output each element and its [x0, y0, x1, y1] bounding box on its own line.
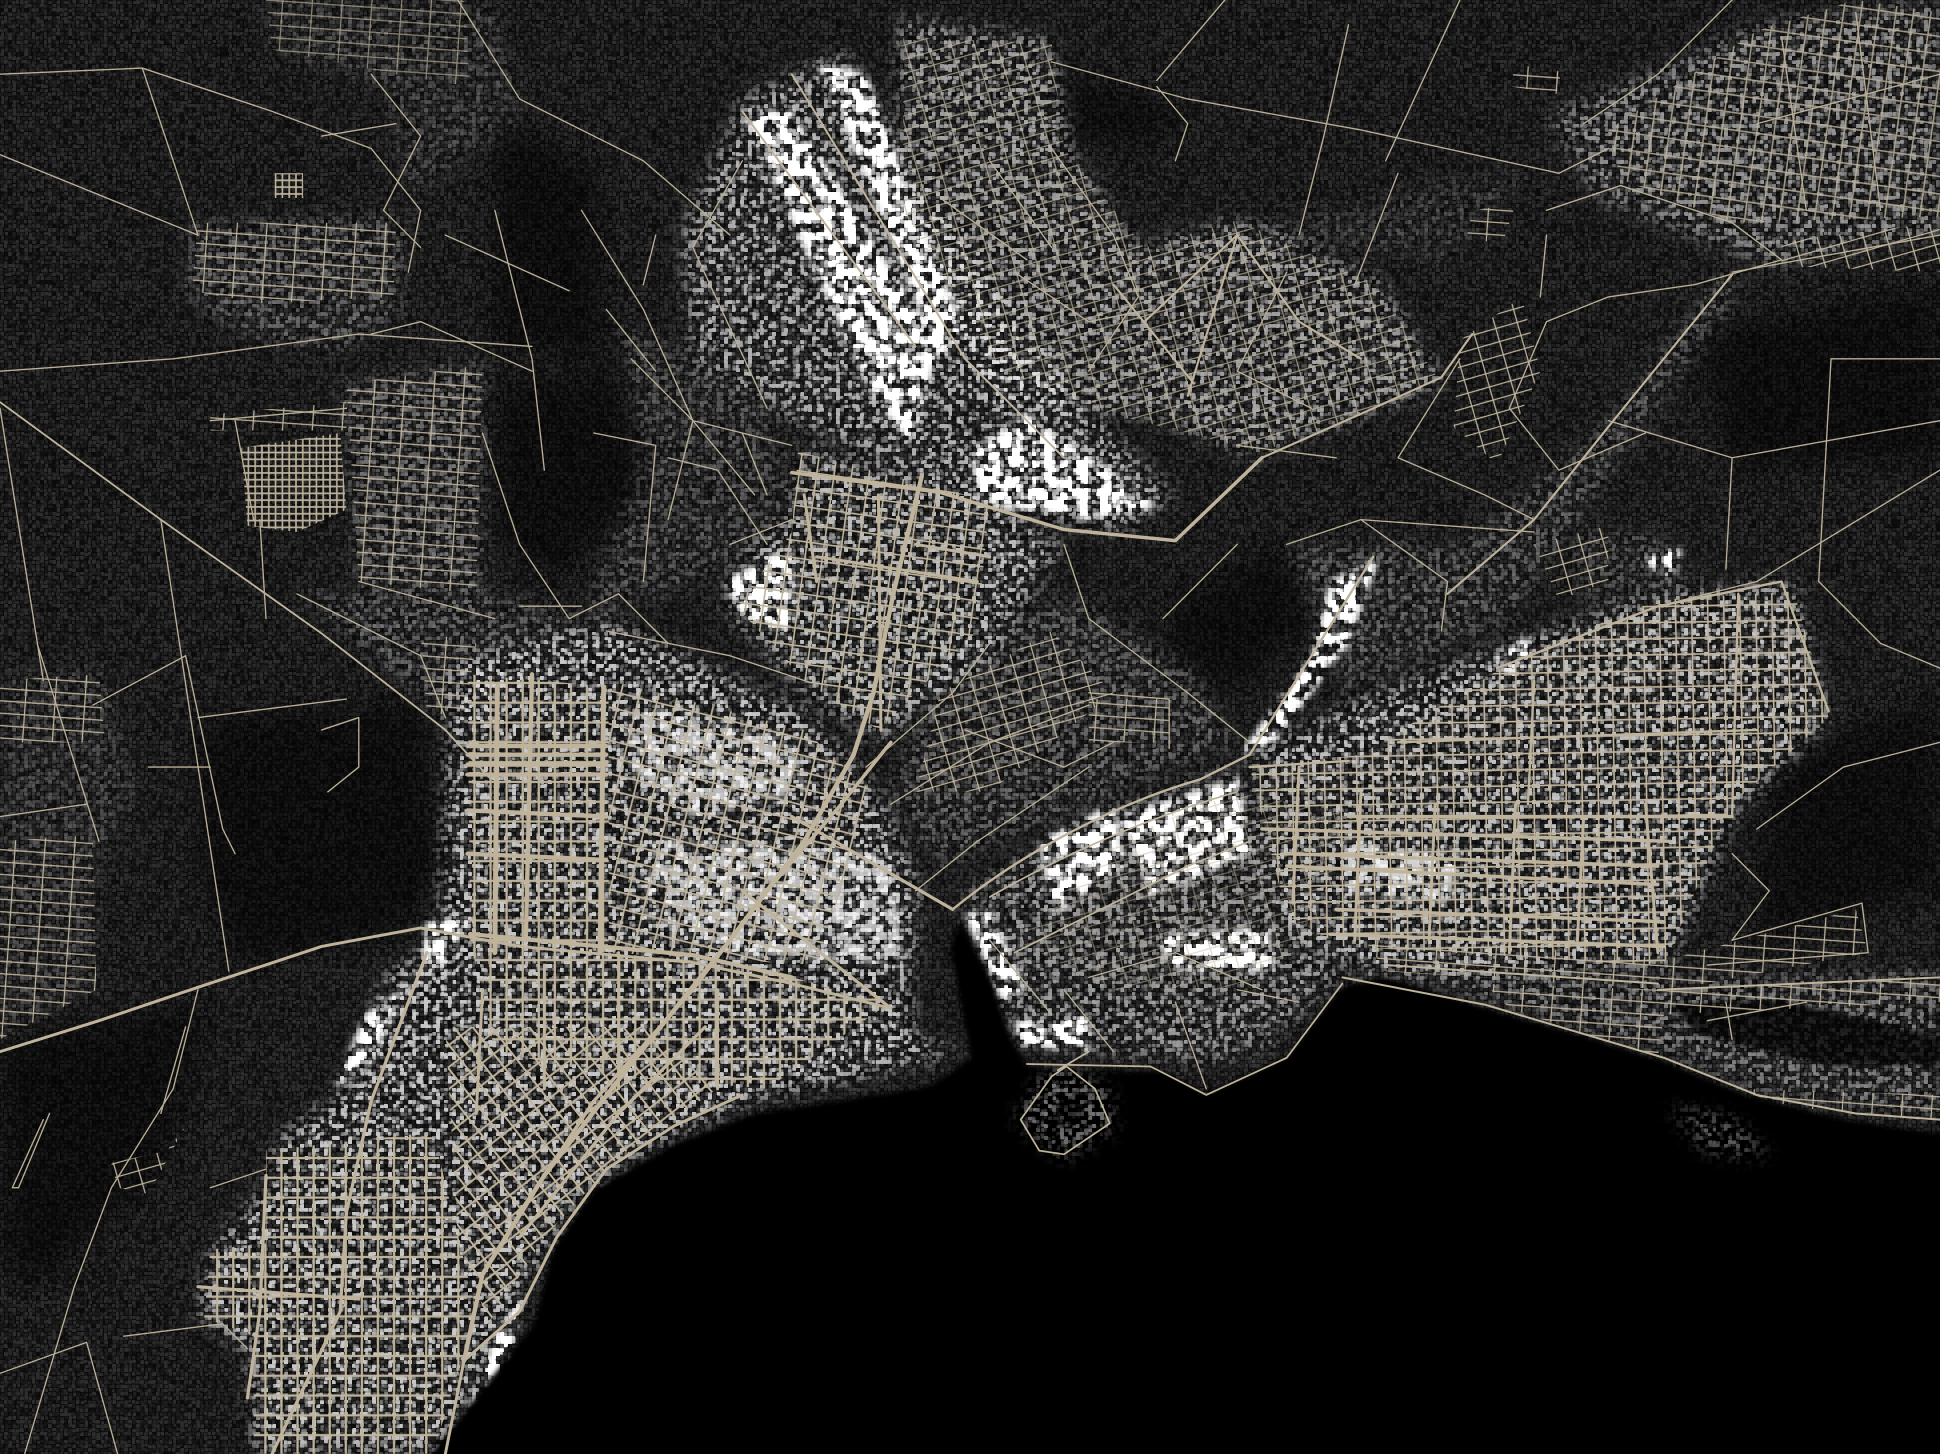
west city: [198, 619, 965, 1454]
road: north west diagonal: [0, 402, 489, 777]
grid: north central: [736, 452, 990, 730]
grid: east city: [1250, 591, 1829, 965]
grid: south diagonal: [445, 1027, 718, 1324]
road: coast avenue: [445, 1095, 742, 1454]
sea: [427, 922, 1940, 1454]
top left town: [266, 0, 520, 198]
left edge towns: [0, 668, 136, 1039]
road: western highway: [0, 928, 891, 1052]
islands: [1017, 1066, 1769, 1157]
road: south west avenues: [198, 953, 433, 1454]
east city: [1250, 581, 1831, 977]
eastern coast: [1386, 965, 1940, 1120]
road: central avenues: [495, 687, 604, 953]
road: harbor arc: [953, 557, 1373, 909]
road: island loop: [1021, 1052, 1110, 1154]
grid: south west district: [204, 1132, 476, 1454]
harbor zone: [959, 767, 1342, 1064]
grid: north east suburbs: [903, 37, 1441, 452]
road: east city avenues: [1262, 817, 1732, 946]
middle patchy: [891, 594, 1237, 866]
bright industrial returns: [334, 62, 1683, 1454]
north central: [724, 445, 1064, 742]
grid: top right town: [1608, 0, 1940, 223]
industrial band: [680, 49, 1175, 532]
grid: middle: [1089, 699, 1169, 742]
grid: left edge: [0, 674, 105, 742]
grid: west centre: [468, 674, 609, 953]
grid: north west villages: [192, 223, 396, 303]
road: north east: [1262, 275, 1732, 594]
top right town: [1546, 0, 1940, 266]
road: coast east: [1342, 965, 1940, 1120]
west villages: [186, 217, 408, 353]
road: north central: [792, 458, 1262, 541]
grid: coast east: [1361, 909, 1868, 990]
north east suburbs: [897, 19, 1448, 458]
